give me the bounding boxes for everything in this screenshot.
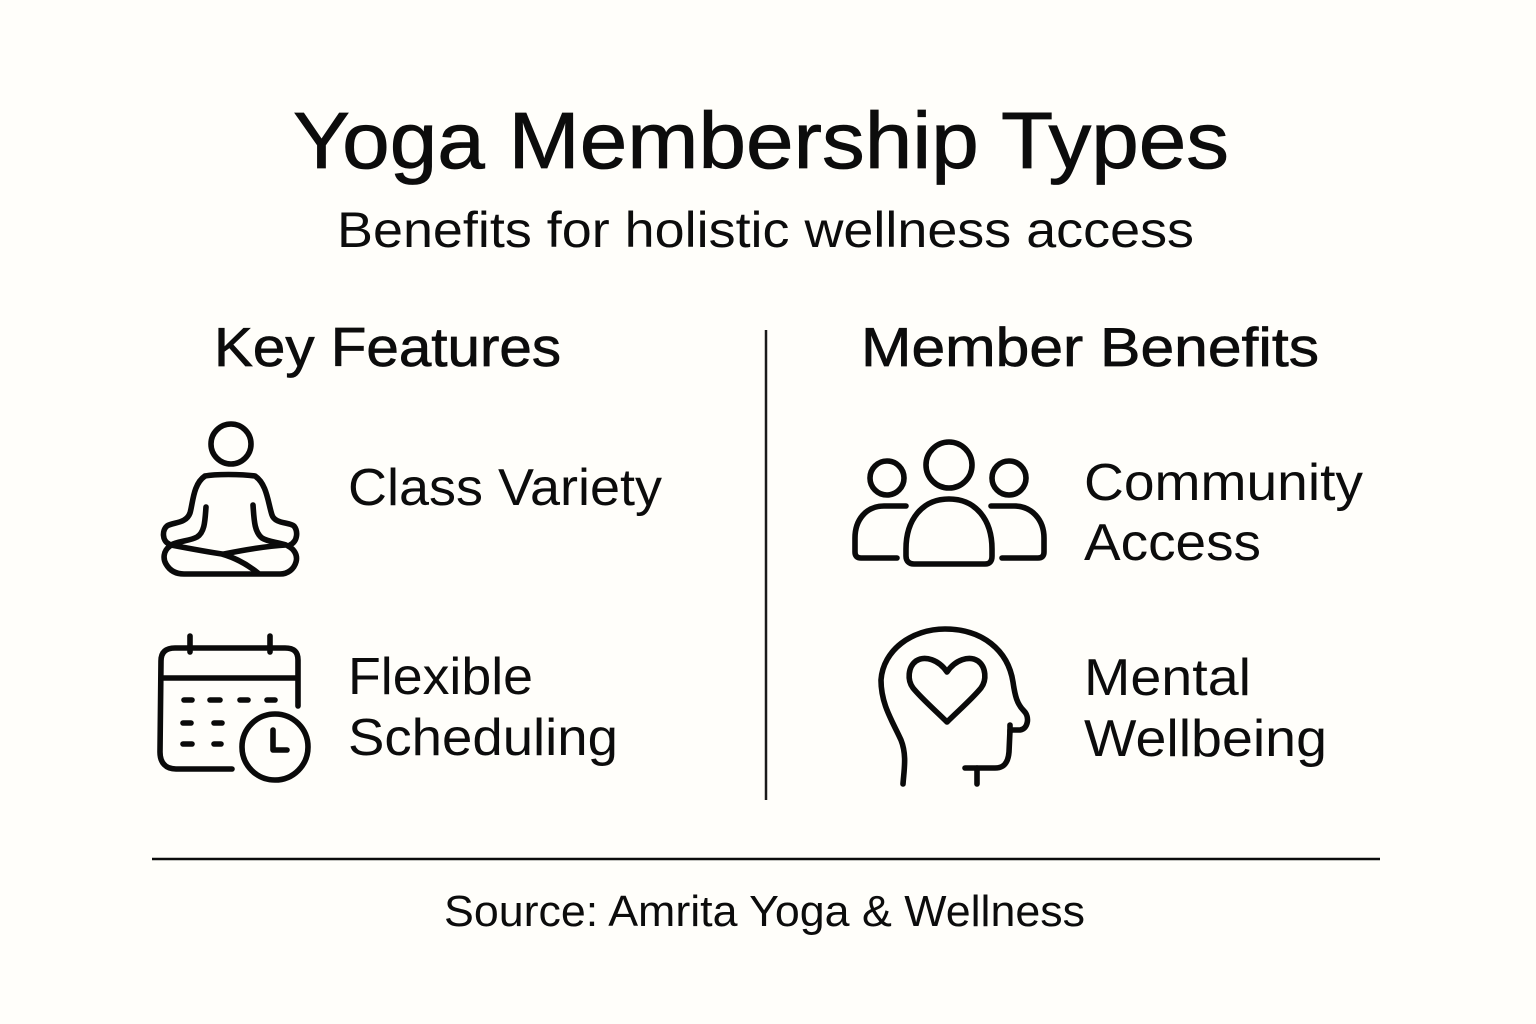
icon: meditating person <box>163 424 297 574</box>
icon: community group <box>855 442 1044 564</box>
panel: member benefits <box>855 316 1363 784</box>
icon: calendar with clock <box>160 636 308 780</box>
icon: head with heart <box>881 629 1027 784</box>
label: community access: Community <box>1084 454 1363 512</box>
label: community access: Access <box>1084 514 1261 572</box>
title: Yoga Membership Types <box>293 96 1229 185</box>
label: mental wellbeing: Mental <box>1084 649 1251 707</box>
label: flexible scheduling: Flexible <box>348 648 533 706</box>
label: community access <box>1084 454 1363 572</box>
label: flexible scheduling: Scheduling <box>348 709 618 767</box>
label: mental wellbeing <box>1084 649 1327 768</box>
label: flexible scheduling <box>348 648 618 767</box>
heading: key features: Key Features <box>214 316 561 378</box>
heading: member benefits: Member Benefits <box>861 316 1319 378</box>
subtitle: Benefits for holistic wellness access <box>337 202 1194 258</box>
source note: Source: Amrita Yoga & Wellness <box>444 887 1085 936</box>
panel: key features <box>160 316 662 780</box>
label: mental wellbeing: Wellbeing <box>1084 710 1327 768</box>
label: class variety: Class Variety <box>348 459 662 517</box>
